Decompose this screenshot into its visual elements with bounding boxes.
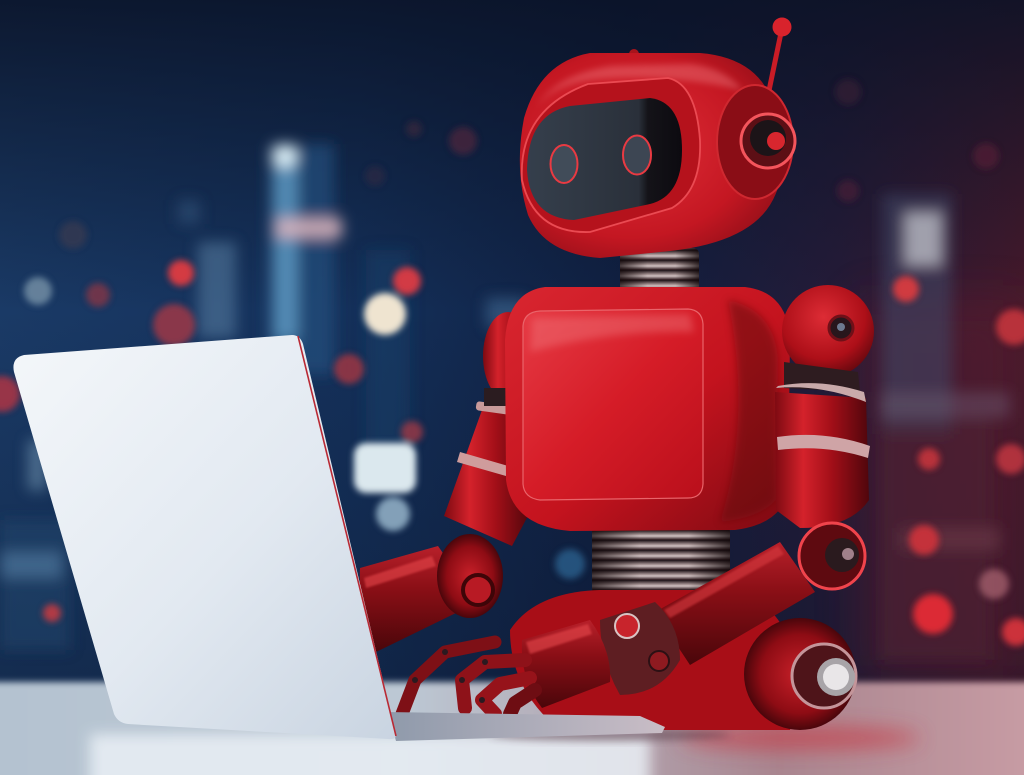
robot: near hip wheel	[744, 618, 856, 730]
robot: fingers	[402, 642, 535, 714]
building: right towers	[880, 194, 1010, 660]
elbow joint	[799, 523, 865, 589]
robot: pelvis	[510, 590, 800, 730]
wrist joint	[600, 602, 680, 695]
building: left small towers	[0, 200, 526, 650]
laptop	[13, 335, 665, 741]
antenna	[766, 18, 792, 105]
laptop base	[388, 712, 665, 741]
ear dial	[717, 85, 795, 199]
table surface	[0, 682, 1024, 775]
right eye	[623, 136, 651, 174]
far wrist joint	[437, 534, 503, 618]
bokeh lights	[0, 79, 1024, 646]
left eye	[550, 145, 578, 183]
far shoulder	[483, 312, 533, 400]
visor screen	[527, 98, 682, 220]
robot: near forearm	[522, 523, 865, 708]
finger knuckles	[412, 649, 488, 703]
hand cuff	[522, 620, 610, 708]
robot: waist spring	[592, 526, 730, 594]
chest panel	[523, 309, 703, 500]
robot: near upper arm	[775, 383, 870, 528]
far upper arm	[444, 410, 530, 546]
robot: torso	[505, 287, 790, 531]
laptop screen	[13, 335, 396, 739]
robot: far arm	[360, 312, 533, 652]
robot: neck spring	[620, 248, 699, 294]
head shell	[520, 53, 782, 258]
robot: head	[520, 18, 795, 258]
visor frame	[522, 78, 700, 232]
building: bright blue tower	[268, 144, 342, 374]
robot	[360, 18, 874, 730]
robot: near shoulder	[782, 285, 874, 392]
far forearm	[360, 546, 458, 652]
